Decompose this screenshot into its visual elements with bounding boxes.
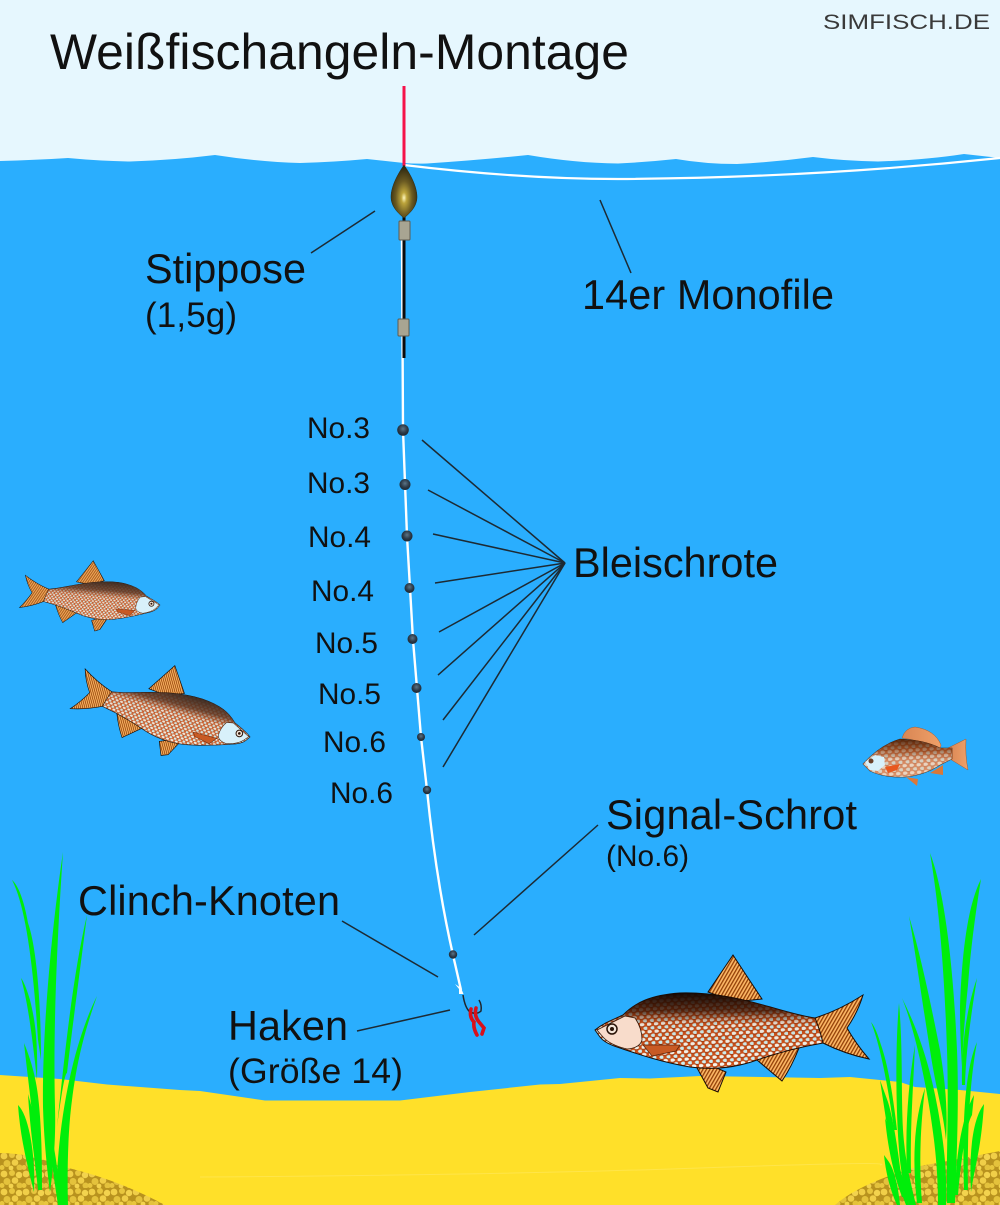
label: 14er Monofile: 14er Monofile <box>582 272 834 318</box>
leader: Signal-Schrot <box>474 825 598 935</box>
fish: crucian right <box>863 727 968 786</box>
float stem <box>402 216 406 358</box>
title: Weißfischangeln-Montage <box>50 24 629 80</box>
label: Signal-Schrot: Signal-Schrot <box>606 792 858 838</box>
leader: Monofile <box>600 200 631 273</box>
leader: Clinch-Knoten <box>342 921 438 977</box>
worm bait <box>470 1008 484 1035</box>
float body <box>391 165 417 218</box>
hook <box>463 995 481 1013</box>
watermark: SIMFISCH.DE <box>823 11 990 34</box>
sand seabed <box>0 1075 1000 1205</box>
shot size labels: No.3 <box>307 467 370 500</box>
label: Stippose: Stippose <box>145 246 306 292</box>
sky background <box>0 0 1000 200</box>
monofilament line surface section <box>404 158 1000 179</box>
plants right <box>871 853 984 1205</box>
label: Haken: Haken <box>228 1003 348 1049</box>
shot size labels: No.5 <box>315 627 378 660</box>
shot size labels <box>307 412 393 810</box>
float sleeve upper <box>399 221 410 240</box>
plants left <box>12 852 97 1205</box>
shot size labels: No.4 <box>311 575 374 608</box>
float sleeve lower <box>398 319 409 336</box>
label: Größe 14: (Größe 14) <box>228 1051 403 1091</box>
shot size labels: No.5 <box>318 678 381 711</box>
signal shot <box>449 950 457 959</box>
pebbles left <box>0 1153 165 1205</box>
pebbles right <box>835 1151 1000 1205</box>
hook with bait <box>463 995 484 1035</box>
fish: large bottom <box>595 955 869 1092</box>
shot size labels: No.6 <box>330 777 393 810</box>
label: No.6 signal: (No.6) <box>606 840 689 873</box>
float antenna <box>402 86 406 166</box>
split shots <box>397 424 431 794</box>
shot size labels: No.6 <box>323 726 386 759</box>
shot size labels: No.4 <box>308 521 371 554</box>
float <box>391 86 417 358</box>
clinch knot <box>455 984 464 994</box>
fish: lower left <box>65 642 263 777</box>
leader: Stippose <box>311 211 375 253</box>
fish: upper left <box>18 555 163 636</box>
label: Bleischrote: Bleischrote <box>573 540 778 586</box>
main line down to hook <box>402 240 461 990</box>
shot size labels: No.3 <box>307 412 370 445</box>
leaders: Bleischrote <box>422 440 565 767</box>
leader: Haken <box>357 1010 450 1031</box>
label: 1,5g: (1,5g) <box>145 296 237 335</box>
label: Clinch-Knoten: Clinch-Knoten <box>78 878 340 924</box>
